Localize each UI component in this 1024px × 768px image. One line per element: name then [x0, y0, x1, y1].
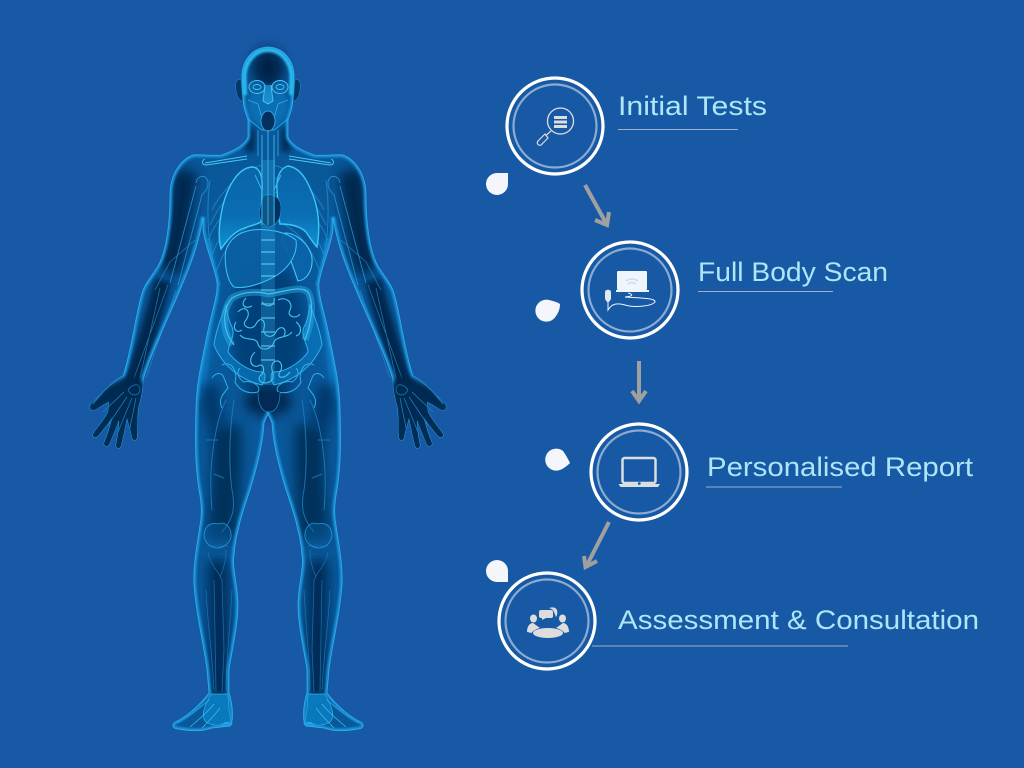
stomach — [281, 233, 312, 281]
step 3 marker drop — [545, 449, 570, 471]
infographic canvas — [89, 41, 978, 732]
step 2 ring — [582, 242, 678, 338]
small intestine — [225, 289, 312, 383]
icon: laptop — [618, 458, 660, 487]
step 4 marker drop — [486, 560, 508, 582]
step 2 marker drop — [535, 300, 560, 322]
step 4 title: Assessment & Consultation — [618, 605, 979, 635]
step 3 title: Personalised Report — [707, 452, 974, 482]
icon: meeting around a table — [527, 607, 569, 638]
step 3 ring — [591, 424, 687, 520]
body silhouette — [89, 47, 447, 731]
arrow: step 2 to step 3 — [632, 361, 646, 401]
step 4: assessment and consultation — [486, 560, 979, 669]
step 3 underline — [706, 486, 842, 488]
step 3: personalised report — [545, 424, 974, 520]
arrow: step 3 to step 4 — [584, 522, 609, 567]
step 1 ring — [507, 78, 603, 174]
liver — [225, 229, 296, 288]
step 1: initial tests — [486, 78, 767, 195]
human body illustration — [85, 47, 451, 731]
arrow: step 1 to step 2 — [585, 185, 609, 225]
dark hands — [85, 376, 451, 455]
spine — [255, 130, 281, 385]
heart — [259, 194, 281, 227]
crotch — [258, 392, 280, 412]
icon: laptop with ultrasound probe — [605, 271, 655, 310]
step 2 title: Full Body Scan — [698, 257, 888, 287]
step 2 underline — [698, 291, 833, 292]
step 4 ring — [499, 573, 595, 669]
step 1 title: Initial Tests — [618, 91, 767, 121]
step 1 underline — [618, 129, 738, 130]
step 2: full body scan — [535, 242, 888, 338]
step 1 marker drop — [486, 173, 508, 195]
silhouette glowing edge — [89, 47, 447, 731]
lungs — [219, 166, 319, 249]
step 4 underline — [592, 646, 848, 647]
head glow — [244, 50, 292, 95]
head and skull — [247, 80, 289, 156]
large intestine — [224, 289, 312, 345]
icon: magnifier over database — [537, 108, 574, 145]
